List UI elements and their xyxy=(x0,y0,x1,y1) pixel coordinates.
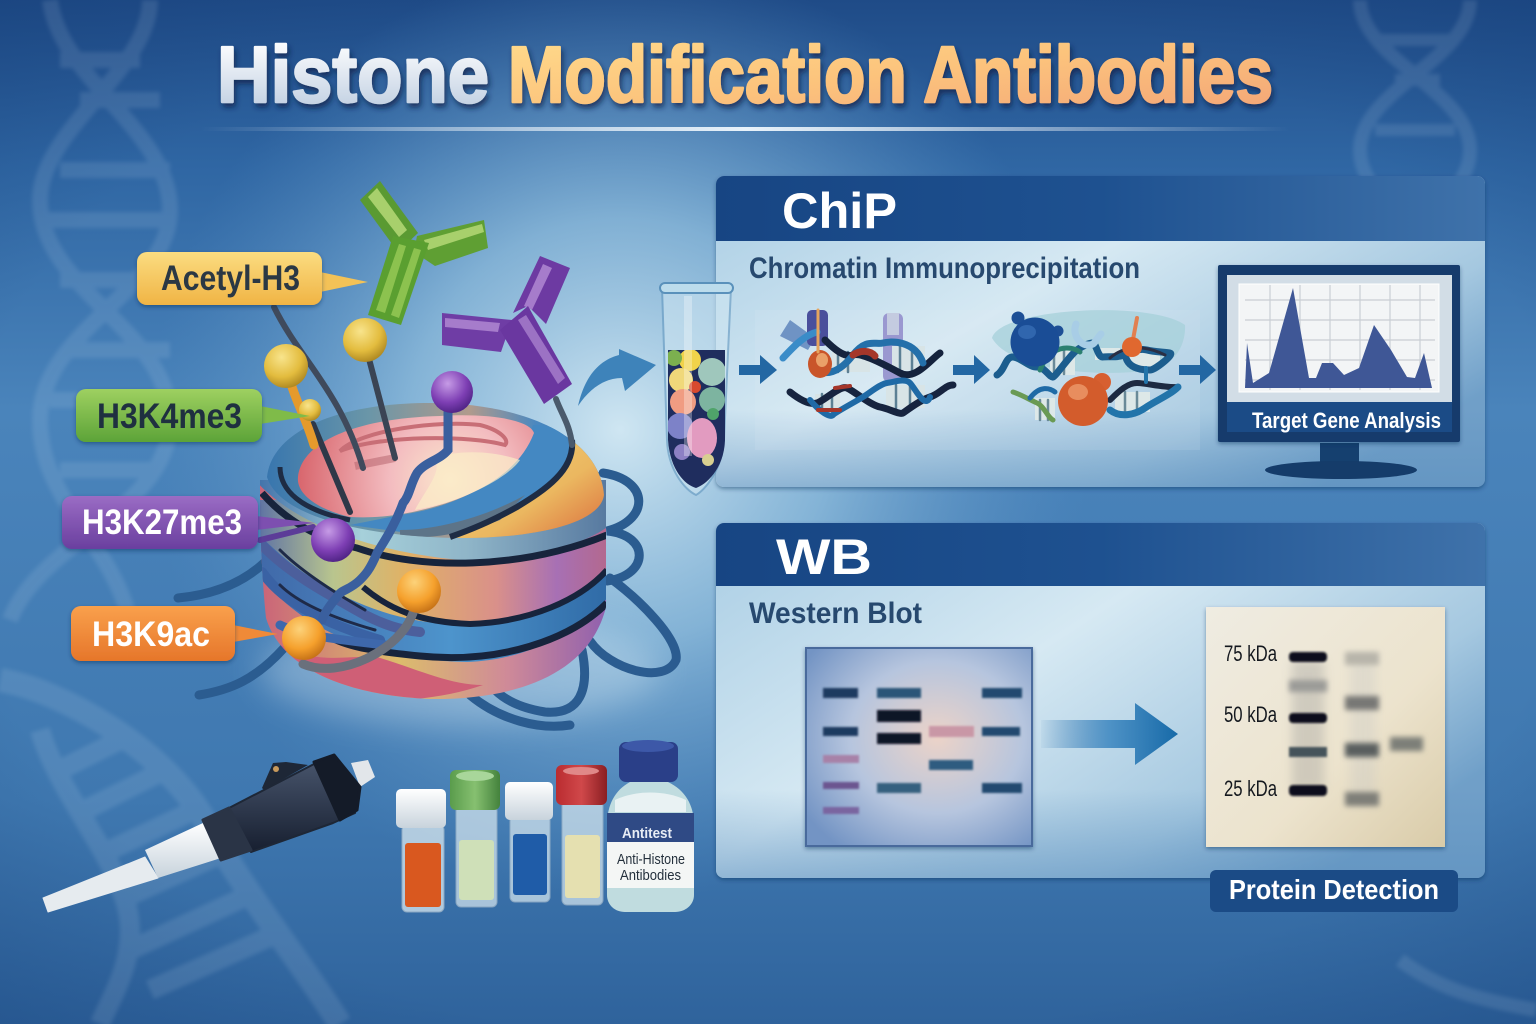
WB subtitle: Western Blot xyxy=(749,597,922,630)
ChiP inner workflow background xyxy=(755,310,1200,450)
arrow: to monitor xyxy=(1179,355,1216,384)
DNA strand loops xyxy=(178,473,676,726)
monitor caption: Target Gene Analysis xyxy=(1252,408,1441,433)
label: H3K9ac: H3K9ac xyxy=(92,615,210,654)
kDa markers: 50 kDa xyxy=(1224,702,1278,727)
Protein Detection tag xyxy=(1210,870,1458,912)
curved arrow: to test tube xyxy=(578,349,656,406)
vial: blue xyxy=(505,782,553,902)
vial: orange xyxy=(396,789,446,912)
antibody: purple xyxy=(442,256,572,404)
label: Acetyl-H3: Acetyl-H3 xyxy=(161,259,300,298)
vial: green cap xyxy=(450,770,500,907)
histone dome xyxy=(267,403,610,540)
label: H3K4me3: H3K4me3 xyxy=(97,397,242,436)
ChiP heading: ChiP xyxy=(782,183,897,239)
bottle: Anti-Histone Antibodies: Antibodies xyxy=(620,867,681,884)
nucleosome illustration xyxy=(178,307,676,726)
icon: protein-DNA complexes xyxy=(992,310,1185,426)
title: Histone xyxy=(217,30,489,119)
test tube xyxy=(660,283,733,495)
label: Acetyl-H3 xyxy=(137,252,368,305)
title: Modification Antibodies xyxy=(508,30,1273,119)
label: H3K9ac xyxy=(71,606,278,661)
label: H3K27me3: H3K27me3 xyxy=(82,503,242,542)
vial: red cap xyxy=(556,765,607,905)
WB header bar xyxy=(716,523,1485,586)
arrow: to DNA complex xyxy=(739,355,777,384)
peak chart xyxy=(1245,288,1432,388)
icon: antibody-bound DNA helices xyxy=(780,310,953,416)
gel with bands xyxy=(806,648,1032,846)
left strand wraps xyxy=(262,545,420,645)
bottle: Anti-Histone Antibodies: Anti-Histone xyxy=(617,851,685,868)
icon: monitor with target gene analysis xyxy=(1218,265,1460,479)
kDa markers xyxy=(1224,641,1278,801)
histone body xyxy=(255,480,615,705)
arrow: to protein complex xyxy=(953,355,990,384)
histone tails xyxy=(260,307,572,668)
icon: pipette xyxy=(43,755,375,912)
Protein Detection tag: Protein Detection xyxy=(1229,874,1439,905)
kDa markers: 75 kDa xyxy=(1224,641,1278,666)
kDa markers: 25 kDa xyxy=(1224,776,1278,801)
modification balls xyxy=(264,318,473,660)
panel: WB xyxy=(716,523,1485,912)
panel: ChiP xyxy=(716,176,1485,487)
title xyxy=(217,30,1273,119)
antibody: green xyxy=(360,181,488,325)
ChiP subtitle: Chromatin Immunoprecipitation xyxy=(749,252,1140,285)
ChiP header bar xyxy=(716,176,1485,241)
label: H3K4me3 xyxy=(76,389,310,442)
bottle: Anti-Histone Antibodies: Antitest xyxy=(622,825,672,842)
label: H3K27me3 xyxy=(62,496,315,549)
arrow: gel to membrane xyxy=(1041,703,1178,765)
bottle: Anti-Histone Antibodies xyxy=(607,740,694,912)
western blot membrane xyxy=(1206,607,1445,847)
WB heading: WB xyxy=(776,529,872,585)
